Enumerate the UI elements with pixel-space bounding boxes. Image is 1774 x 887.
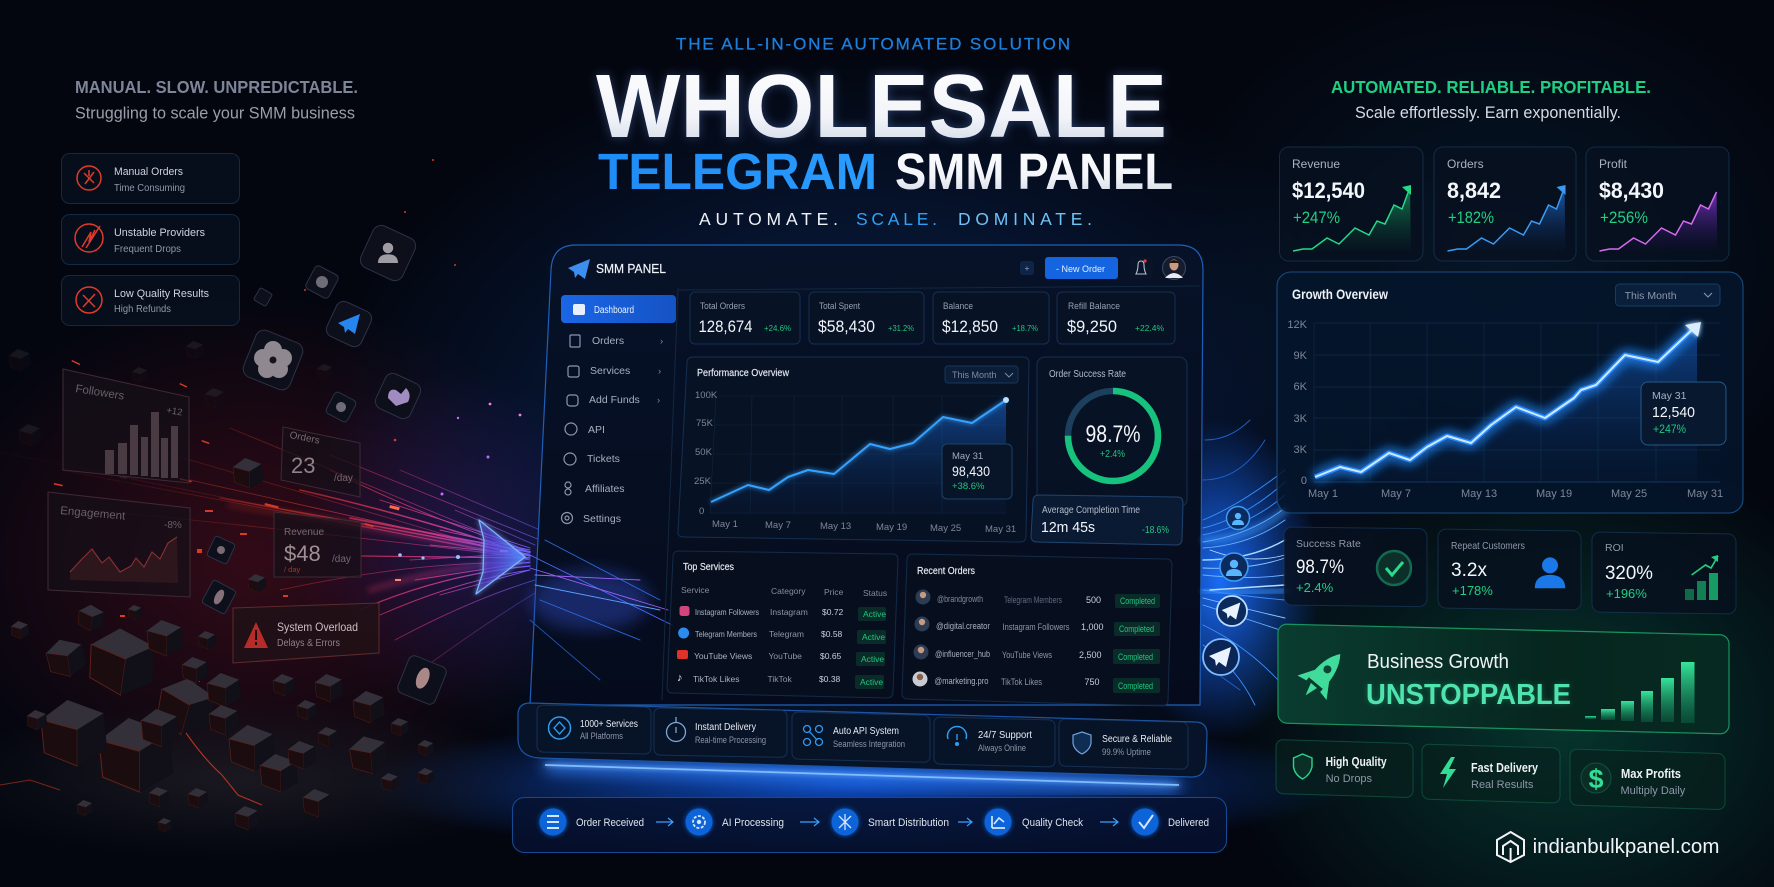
- icon: telegram tile: [324, 299, 374, 349]
- feature: instant delivery: Instant Delivery: [695, 722, 756, 733]
- panel: manual orders: [62, 154, 240, 204]
- stat card: repeat customers: +178%: [1452, 583, 1493, 598]
- row: youtube: [677, 650, 885, 666]
- row: influencer hub: Completed: [1118, 652, 1153, 662]
- icon: flower tile: [240, 327, 306, 393]
- card: high quality: High Quality: [1326, 755, 1387, 769]
- row: digital creator: 1,000: [1081, 622, 1104, 632]
- ghost chart: followers: [63, 369, 189, 483]
- axis labels: 75K: [696, 418, 714, 429]
- row: instagram: Instagram: [770, 607, 808, 617]
- stat card: refill balance: Refill Balance: [1068, 301, 1120, 312]
- tooltip: May 31: [952, 451, 983, 462]
- icon: dollar: [1581, 763, 1611, 794]
- feature: secure: Secure & Reliable: [1102, 734, 1172, 745]
- panel: business growth unstoppable: UNSTOPPABLE: [1366, 679, 1571, 711]
- panel: top services table: Category: [771, 586, 806, 596]
- dropdown: [1616, 284, 1720, 306]
- row: brandgrowth: Telegram Members: [1004, 595, 1062, 605]
- kpi card: profit: Profit: [1599, 157, 1628, 171]
- nav: dashboard active: Dashboard: [594, 305, 634, 316]
- nav: orders: Orders: [592, 335, 624, 347]
- axis labels: 3K: [1294, 413, 1308, 425]
- panel: unstable providers: Unstable Providers: [114, 227, 205, 239]
- row: telegram: Telegram: [769, 629, 804, 639]
- dashboard sidebar: [561, 295, 676, 525]
- icon: warning triangle: [244, 622, 268, 648]
- stat card: repeat customers: 3.2x: [1451, 560, 1487, 581]
- card: max profits: [1570, 749, 1725, 810]
- axis labels: May 25: [930, 523, 961, 534]
- axis labels: 50K: [695, 447, 713, 458]
- nav: tickets: Tickets: [587, 453, 620, 465]
- stat card: total orders: +24.6%: [764, 323, 791, 333]
- tooltip: May 31: [1652, 390, 1687, 402]
- floating badge: telegram: [1217, 596, 1247, 626]
- icon: rocket: [1291, 642, 1355, 708]
- stat card: refill balance: $9,250: [1067, 318, 1117, 336]
- left heading: Struggling to scale your SMM business: [75, 104, 355, 122]
- stat card: balance: Balance: [943, 301, 973, 312]
- floating badge: user large: [1220, 553, 1248, 581]
- row: digital creator: Instagram Followers: [1002, 622, 1070, 632]
- kpi card: orders: [1434, 147, 1576, 261]
- title block: [596, 34, 1173, 229]
- slogan: SCALE.: [856, 209, 937, 229]
- bar chart: [1585, 662, 1694, 723]
- nav: services: Services: [590, 365, 630, 377]
- card: high quality: No Drops: [1326, 773, 1373, 785]
- dashboard frame: [530, 245, 1203, 705]
- slogan: AUTOMATE.: [699, 209, 838, 229]
- panel: average completion time: Average Completion Time: [1042, 505, 1140, 516]
- feature: instant delivery: Real-time Processing: [695, 735, 766, 745]
- stat card: balance: +18.7%: [1012, 323, 1038, 333]
- axis labels: May 31: [1687, 488, 1723, 500]
- icon: dollar: $: [1588, 764, 1604, 794]
- panel: order success rate: [1037, 357, 1187, 507]
- panel: performance overview chart: Performance Overview: [697, 368, 790, 379]
- stat card: roi: [1592, 532, 1736, 614]
- row: digital creator: @digital.creator: [936, 621, 990, 631]
- feature: support: Always Online: [978, 743, 1026, 753]
- card: high quality: [1276, 740, 1413, 798]
- right heading: [1331, 77, 1651, 122]
- ghost chart: engagement: -8%: [164, 520, 182, 531]
- arrow pointing into the dashboard: [476, 520, 525, 594]
- axis labels: [694, 390, 1016, 535]
- stat card: repeat customers: Repeat Customers: [1451, 540, 1525, 552]
- row: tiktok: TikTok Likes: [693, 674, 739, 684]
- panel: manual orders: Time Consuming: [114, 183, 185, 194]
- panel: unstable providers: Frequent Drops: [114, 244, 181, 255]
- ghost card: revenue: $48: [284, 541, 321, 566]
- row: brandgrowth: 500: [1086, 595, 1101, 605]
- step: order received: Order Received: [576, 817, 644, 829]
- icon: shield: [1294, 754, 1312, 779]
- axis labels: 100K: [695, 390, 718, 401]
- row: tiktok: TikTok: [768, 674, 792, 684]
- row: tiktok: [677, 672, 884, 689]
- axis labels: May 7: [1381, 488, 1411, 500]
- step: ai processing: AI Processing: [722, 817, 784, 829]
- step: smart distribution: [832, 808, 949, 836]
- kpi card: profit: +256%: [1600, 208, 1648, 227]
- nav: tickets: [564, 453, 620, 465]
- icon: telegram logo: [568, 259, 590, 279]
- feature: instant delivery: [654, 708, 787, 757]
- grid: [710, 396, 1006, 513]
- icon: check circle: [1377, 551, 1411, 585]
- step: order received: [540, 808, 644, 836]
- stat card: success rate: 98.7%: [1296, 557, 1344, 578]
- panel: unstable providers: [62, 214, 240, 264]
- card: fast delivery: [1422, 744, 1560, 803]
- ghost card: revenue: [274, 512, 361, 577]
- axis labels: 9K: [1294, 350, 1308, 362]
- tooltip: +38.6%: [952, 481, 985, 492]
- internal streaks seen through the glass: [530, 540, 672, 680]
- row: marketing pro: 750: [1084, 677, 1100, 687]
- row: instagram: $0.72: [822, 607, 844, 617]
- row: tiktok: ♪: [677, 672, 682, 684]
- arrow: [800, 818, 819, 826]
- nav: orders: [570, 335, 663, 347]
- stat card: refill balance: [1057, 292, 1175, 344]
- ghost chart: followers: +12: [166, 405, 183, 418]
- stat card: roi: +196%: [1606, 586, 1647, 601]
- card: max profits: Multiply Daily: [1620, 785, 1686, 797]
- nav: dashboard active: [561, 295, 676, 323]
- glowing stand under dashboard: [545, 765, 1179, 785]
- axis labels: May 1: [1308, 488, 1338, 500]
- kpi card: revenue: $12,540: [1292, 178, 1365, 203]
- left speed streaks converging on the arrow: [0, 428, 540, 665]
- sparkline: [1600, 192, 1718, 251]
- axis labels: May 31: [985, 524, 1016, 535]
- nav: add funds: ›: [657, 395, 660, 406]
- feature: secure: 99.9% Uptime: [1102, 747, 1151, 757]
- stat card: success rate: [1284, 527, 1427, 607]
- stat card: total spent: +31.2%: [888, 323, 914, 333]
- axis labels: May 1: [712, 519, 738, 530]
- red sparks and small debris dots: [54, 159, 521, 682]
- panel: low quality results: High Refunds: [114, 304, 171, 315]
- row: influencer hub: 2,500: [1079, 650, 1102, 660]
- nav: api: [565, 423, 605, 436]
- ghost card: orders: 23: [291, 453, 315, 478]
- row: digital creator: Completed: [1119, 624, 1154, 634]
- stat card: balance: $12,850: [942, 318, 998, 336]
- axis labels: May 13: [820, 521, 851, 532]
- row: influencer hub: @influencer_hub: [935, 649, 990, 659]
- row: youtube: YouTube Views: [694, 651, 752, 661]
- kpi card: profit: [1586, 147, 1729, 261]
- feature: services: 1000+ Services: [580, 719, 638, 730]
- left heading: [75, 77, 358, 122]
- row: instagram: [680, 606, 886, 621]
- card: max profits: Max Profits: [1621, 767, 1681, 781]
- website logo: indianbulkpanel.com: [1533, 836, 1719, 858]
- dropdown: [945, 366, 1018, 383]
- ghost card: orders: /day: [334, 473, 353, 484]
- panel: top services table: [667, 551, 898, 698]
- dropdown: This Month: [1625, 290, 1677, 302]
- axis labels: [1287, 319, 1723, 500]
- panel: average completion time: 12m 45s: [1041, 519, 1095, 536]
- stat card: roi: ROI: [1605, 542, 1624, 554]
- ghost card: revenue: /day: [332, 554, 351, 565]
- row: tiktok: $0.38: [819, 674, 841, 684]
- stat card: total spent: Total Spent: [819, 301, 860, 312]
- tooltip: [942, 444, 1012, 499]
- feature: auto api: Auto API System: [833, 726, 899, 737]
- row: influencer hub: [914, 644, 1160, 664]
- sparkline: [1293, 185, 1411, 251]
- row: brandgrowth: [916, 590, 1160, 608]
- row: youtube: $0.65: [820, 651, 842, 661]
- kpi card: orders: 8,842: [1447, 178, 1501, 203]
- kpi card: revenue: Revenue: [1292, 157, 1340, 171]
- stat card: total orders: [690, 292, 800, 344]
- axis labels: May 25: [1611, 488, 1647, 500]
- website logo: [1497, 832, 1719, 862]
- stat card: balance: [933, 292, 1049, 344]
- ghost card: revenue: / day: [284, 565, 301, 574]
- title: telegram: TELEGRAM: [598, 143, 877, 200]
- row: instagram: Active: [863, 609, 886, 619]
- panel: average completion time: -18.6%: [1142, 524, 1169, 536]
- feature: auto api: Seamless Integration: [833, 739, 905, 749]
- stat card: roi: 320%: [1605, 563, 1653, 584]
- nav: services: [568, 365, 661, 377]
- nav: add funds: [567, 394, 660, 406]
- panel: order success rate: 98.7%: [1086, 421, 1140, 448]
- axis labels: May 7: [765, 520, 791, 531]
- tooltip: 12,540: [1652, 404, 1695, 421]
- row: marketing pro: Completed: [1118, 681, 1153, 691]
- feature: secure: [1059, 719, 1188, 769]
- kpi card: orders: +182%: [1448, 208, 1494, 227]
- tooltip: +247%: [1653, 424, 1686, 436]
- row: telegram: Active: [862, 632, 885, 642]
- left heading: MANUAL. SLOW. UNPREDICTABLE.: [75, 77, 358, 97]
- button: new order: - New Order: [1056, 264, 1105, 275]
- kpi card: revenue: +247%: [1293, 208, 1340, 227]
- ghost card: revenue: Revenue: [284, 527, 324, 538]
- row: tiktok: Active: [860, 677, 883, 687]
- nav: affiliates: Affiliates: [585, 483, 624, 495]
- panel: recent orders table: [902, 554, 1172, 706]
- panel: order success rate: Order Success Rate: [1049, 369, 1126, 380]
- panel: low quality results: [62, 276, 240, 326]
- kpi card: profit: $8,430: [1599, 178, 1664, 203]
- ghost card: orders: Orders: [289, 430, 321, 447]
- axis labels: 25K: [694, 476, 712, 487]
- icon: hexagon logo: [1497, 832, 1524, 862]
- step: quality check: Quality Check: [1022, 817, 1083, 829]
- panel: recent orders table: Recent Orders: [917, 565, 975, 577]
- stat card: repeat customers: [1438, 529, 1581, 610]
- row: youtube: YouTube: [768, 651, 802, 661]
- line: [1315, 327, 1695, 477]
- stat card: refill balance: +22.4%: [1135, 323, 1164, 333]
- debris pile of broken rocks: [0, 338, 434, 832]
- axis labels: 0: [1301, 475, 1307, 487]
- area: [1315, 325, 1697, 482]
- slogan: DOMINATE.: [958, 209, 1092, 229]
- panel: low quality results: Low Quality Results: [114, 288, 209, 300]
- axis labels: 0: [699, 506, 704, 517]
- row: telegram: [678, 628, 886, 644]
- step: delivered: Delivered: [1168, 817, 1209, 829]
- dashboard header: +: [1025, 264, 1030, 273]
- panel: business growth unstoppable: Business Growth: [1367, 651, 1509, 673]
- feature: services: All Platforms: [580, 731, 623, 741]
- panel: top services table: Status: [863, 588, 887, 598]
- nav: api: API: [588, 424, 605, 436]
- icon: growth bars: [1685, 555, 1718, 600]
- ghost card: orders: [281, 427, 360, 497]
- kpi card: revenue: [1280, 147, 1423, 261]
- slogan: [611, 209, 1160, 229]
- row: marketing pro: [912, 672, 1160, 693]
- small broken tiles: [304, 264, 340, 300]
- panel: top services table: Service: [681, 585, 710, 595]
- process flow bar: [512, 798, 1226, 852]
- floating badge: telegram large: [1203, 639, 1239, 675]
- panel: manual orders: Manual Orders: [114, 166, 183, 178]
- dashboard header: [568, 256, 1186, 280]
- row: brandgrowth: Completed: [1120, 596, 1155, 606]
- nav: settings: Settings: [583, 513, 621, 525]
- nav: services: ›: [658, 366, 661, 377]
- stat card: total orders: 128,674: [698, 318, 752, 336]
- line: [711, 400, 1006, 502]
- tooltip: [1641, 382, 1726, 445]
- axis labels: May 13: [1461, 488, 1497, 500]
- callout: system overload: System Overload: [277, 620, 358, 634]
- stat card: success rate: +2.4%: [1296, 580, 1334, 595]
- right blue light streams: [1203, 420, 1285, 705]
- step: smart distribution: Smart Distribution: [868, 817, 949, 829]
- ghost chart: engagement: Engagement: [60, 505, 127, 523]
- axis labels: 3K: [1294, 444, 1308, 456]
- title: wholesale: WHOLESALE: [596, 57, 1167, 157]
- kpi card: orders: Orders: [1447, 157, 1484, 171]
- nav: add funds: Add Funds: [589, 394, 640, 406]
- icon: heart tile: [373, 371, 423, 421]
- panel: average completion time: [1031, 495, 1183, 545]
- arrow: [958, 818, 972, 826]
- feature: auto api: [792, 712, 930, 762]
- axis labels: 6K: [1294, 381, 1308, 393]
- tooltip: 98,430: [952, 463, 990, 479]
- nav: orders: ›: [660, 336, 663, 347]
- arrow: [656, 818, 673, 826]
- area: [711, 400, 1006, 513]
- panel: growth overview chart: [1277, 272, 1743, 513]
- icon: bolt: [1440, 757, 1456, 788]
- ghost chart: engagement: [48, 492, 190, 597]
- row: instagram: Instagram Followers: [695, 607, 759, 617]
- callout: system overload: Delays & Errors: [277, 638, 340, 649]
- row: youtube: Active: [861, 654, 884, 664]
- feature strip: [518, 703, 1207, 777]
- dropdown: This Month: [952, 370, 997, 380]
- panel: business growth unstoppable: [1278, 624, 1729, 734]
- icon: customers: [1535, 557, 1565, 588]
- ghost chart: followers: Followers: [75, 383, 125, 403]
- step: quality check: [984, 808, 1083, 836]
- grid: [1314, 323, 1720, 482]
- panel: order success rate: +2.4%: [1100, 448, 1125, 460]
- icon: bell: [1129, 257, 1153, 279]
- row: marketing pro: @marketing.pro: [934, 676, 988, 686]
- feature: services: [537, 705, 651, 754]
- row: influencer hub: YouTube Views: [1002, 650, 1052, 660]
- feature: support: 24/7 Support: [978, 730, 1032, 741]
- right heading: AUTOMATED. RELIABLE. PROFITABLE.: [1331, 77, 1651, 97]
- feature: support: [934, 717, 1055, 767]
- panel: performance overview chart: [678, 357, 1029, 542]
- row: brandgrowth: @brandgrowth: [937, 594, 983, 604]
- icon: avatar: [1162, 256, 1186, 280]
- dashboard header: SMM PANEL: [596, 261, 666, 276]
- card: fast delivery: Fast Delivery: [1471, 761, 1538, 775]
- panel: top services table: Top Services: [683, 561, 734, 573]
- tagline: THE ALL-IN-ONE AUTOMATED SOLUTION: [676, 34, 1070, 54]
- floating app icons: blurred tilted tiles: [201, 222, 448, 706]
- panel: top services table: Price: [824, 587, 844, 597]
- nav: settings: [562, 512, 621, 525]
- button: new order: [1045, 257, 1118, 279]
- row: marketing pro: TikTok Likes: [1001, 677, 1042, 687]
- stat card: success rate: Success Rate: [1296, 538, 1361, 550]
- title: smm panel: SMM PANEL: [895, 143, 1173, 200]
- callout: system overload: [233, 603, 379, 663]
- donut chart: [1068, 391, 1158, 481]
- step: delivered: [1132, 808, 1209, 836]
- arrow: [1100, 818, 1118, 826]
- sparkline: [1448, 185, 1566, 251]
- row: telegram: Telegram Members: [695, 629, 757, 639]
- floating badge: user: [1226, 506, 1250, 530]
- axis labels: May 19: [1536, 488, 1572, 500]
- axis labels: May 19: [876, 522, 907, 533]
- right heading: Scale effortlessly. Earn exponentially.: [1355, 104, 1621, 122]
- icon: user tile: [357, 222, 419, 284]
- stat card: total spent: $58,430: [818, 318, 875, 336]
- axis labels: 12K: [1287, 319, 1308, 331]
- step: ai processing: [686, 808, 784, 836]
- row: telegram: $0.58: [821, 629, 843, 639]
- card: fast delivery: Real Results: [1471, 779, 1534, 791]
- stat card: total spent: [809, 292, 924, 344]
- stat card: total orders: Total Orders: [700, 301, 745, 312]
- nav: affiliates: [565, 482, 624, 495]
- panel: growth overview chart: Growth Overview: [1292, 287, 1388, 302]
- row: digital creator: [914, 616, 1160, 636]
